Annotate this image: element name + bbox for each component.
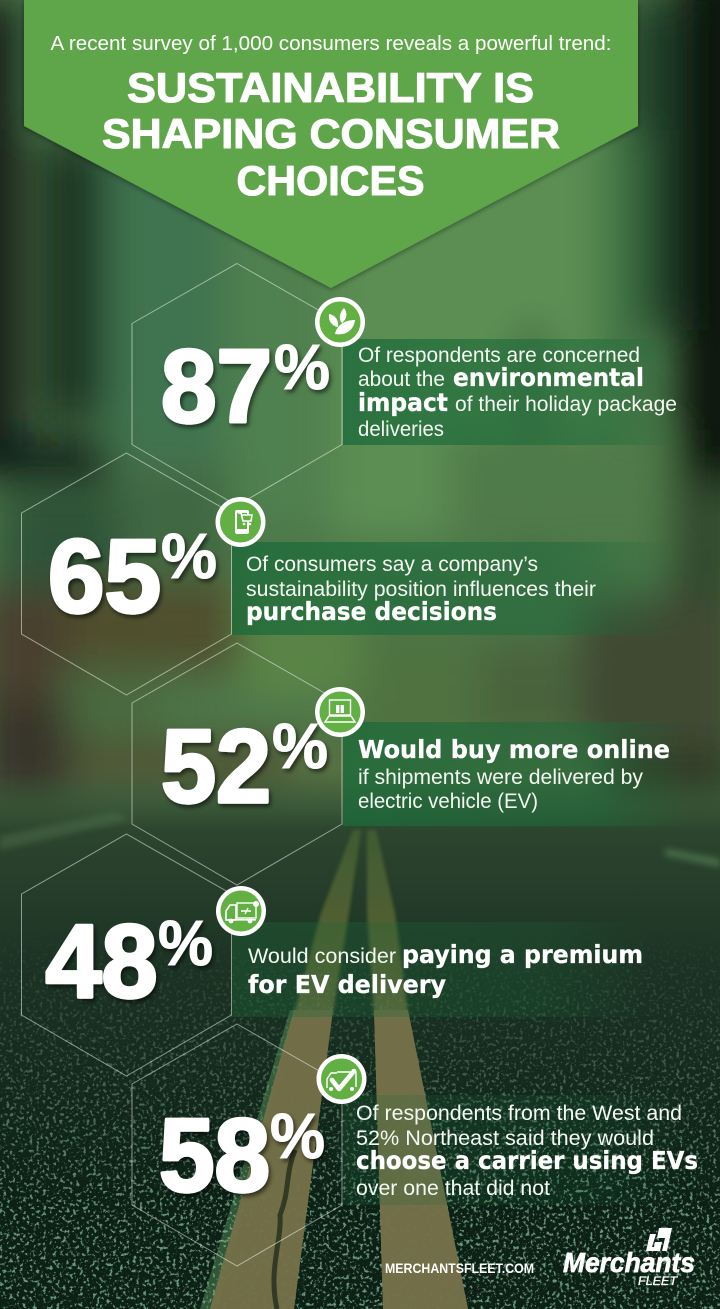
logo: Merchants Fleet: [563, 1228, 695, 1288]
text band: [232, 922, 652, 1017]
title: SHAPING CONSUMER: [102, 110, 560, 157]
description: [356, 1102, 698, 1200]
number 65%: [48, 519, 217, 635]
website address: MERCHANTSFLEET.COM: [385, 1261, 534, 1276]
number 48%: [46, 904, 213, 1020]
number 65%: %: [161, 520, 217, 592]
description: of their holiday package: [455, 393, 677, 416]
description: [358, 735, 670, 813]
number 48%: %: [158, 907, 213, 979]
number 65%: 65: [48, 519, 161, 635]
icon: leaves: [315, 297, 365, 347]
number 87%: [161, 329, 330, 445]
number 48%: 48: [46, 904, 158, 1020]
number 52%: 52: [161, 709, 271, 825]
icon: phone with cart: [216, 497, 266, 547]
hexagon outlines: [22, 264, 342, 1266]
description: 52% Northeast said they would: [356, 1127, 654, 1150]
text band: [343, 1095, 688, 1205]
description: Would buy more online: [358, 735, 670, 764]
description: over one that did not: [356, 1177, 550, 1200]
description: Of respondents are concerned: [358, 344, 640, 367]
description: [248, 940, 643, 999]
description: Would consider: [248, 945, 396, 968]
description: sustainability position influences their: [246, 578, 596, 601]
number 87%: %: [274, 331, 330, 403]
description: [358, 344, 677, 441]
panel: stat 52%: [161, 687, 688, 826]
description: impact: [358, 388, 448, 417]
number 58%: [159, 1098, 325, 1214]
number 87%: 87: [161, 329, 272, 445]
text band: [232, 542, 682, 635]
panel: stat 65%: [48, 497, 682, 635]
description: Of respondents from the West and: [356, 1102, 682, 1125]
description: if shipments were delivered by: [358, 766, 644, 789]
intro line: A recent survey of 1,000 consumers reveals a powerful trend:: [50, 33, 612, 55]
panel: header pennant: [24, 0, 638, 288]
logo mark: [646, 1228, 672, 1251]
number 52%: %: [272, 710, 328, 782]
title: CHOICES: [236, 157, 424, 204]
logo: Merchants Fleet: FLEET: [638, 1274, 679, 1288]
description: [246, 553, 596, 626]
icon: electric delivery truck: [216, 886, 266, 936]
number 52%: [161, 709, 328, 825]
title: SUSTAINABILITY IS: [127, 64, 534, 111]
panel: stat 87%: [161, 297, 688, 445]
description: electric vehicle (EV): [358, 790, 538, 813]
number 58%: 58: [159, 1098, 270, 1214]
panel: stat 48%: [46, 886, 652, 1020]
description: paying a premium: [402, 940, 643, 969]
description: purchase decisions: [246, 597, 497, 626]
panel: stat 58%: [159, 1054, 698, 1214]
description: for EV delivery: [248, 970, 446, 999]
icon: laptop with gift: [315, 687, 365, 737]
description: about the: [358, 368, 445, 391]
number 58%: %: [270, 1100, 325, 1172]
logo: Merchants Fleet: Merchants: [563, 1247, 695, 1278]
icon: truck with check mark: [316, 1054, 366, 1104]
description: deliveries: [358, 418, 444, 441]
description: choose a carrier using EVs: [356, 1146, 698, 1175]
title: [102, 64, 560, 204]
description: Of consumers say a company’s: [246, 553, 538, 576]
text band: [343, 722, 688, 826]
text band: [343, 339, 688, 445]
description: environmental: [453, 363, 644, 392]
